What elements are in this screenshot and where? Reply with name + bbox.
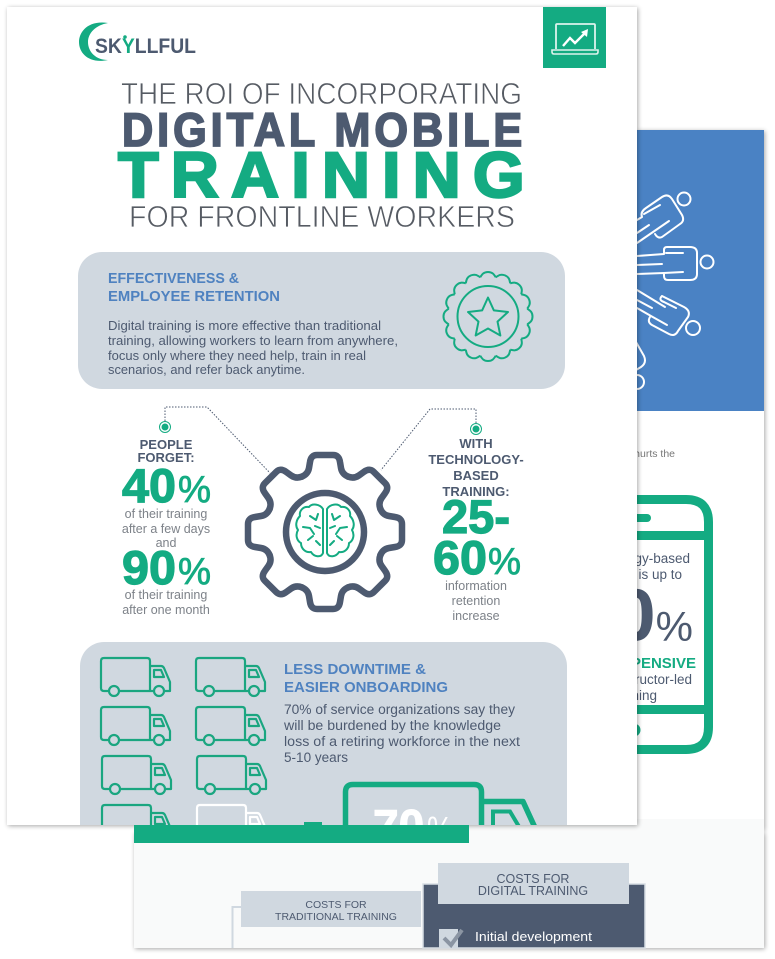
- stat: 90%: [123, 550, 210, 586]
- stat block: technology-based training: WITH: [459, 436, 493, 451]
- stat block: technology-based training: [428, 436, 524, 623]
- icon: truck grid: [101, 658, 266, 838]
- panel: effectiveness and employee retention: EMPLOYEE RETENTION: [108, 288, 280, 305]
- title: [118, 76, 525, 234]
- stat block: people forget: and: [156, 536, 176, 550]
- panel: bottom page costs comparison: [134, 819, 764, 948]
- panel: effectiveness and employee retention: training, allowing workers to learn from anywhere,: [108, 334, 398, 348]
- stat: 40%: %: [178, 469, 211, 511]
- checkbox item: initial development: Initial development: [475, 929, 592, 944]
- icon: star badge: [444, 272, 532, 361]
- phone text: training is up to: [590, 567, 682, 582]
- stat: 90%: %: [178, 551, 211, 593]
- panel: less downtime and easier onboarding: EASIER ONBOARDING: [284, 679, 448, 696]
- stat block: people forget: of their training: [125, 588, 207, 602]
- panel: effectiveness and employee retention: scenarios, and refer back anytime.: [108, 363, 305, 377]
- logo: Skyllful: SKYLLFUL: [95, 35, 196, 58]
- stat block: technology-based training: TECHNOLOGY-: [428, 452, 524, 467]
- icon: large truck with 70%: [342, 782, 537, 825]
- phone text: technology-based: [583, 551, 690, 566]
- title: THE ROI OF INCORPORATING: [121, 76, 522, 111]
- body text fragment: hurts the: [634, 448, 675, 460]
- panel: effectiveness and employee retention: focus only where they need help, train in real: [108, 349, 366, 363]
- icon: phone outline: [600, 500, 708, 750]
- panel: less downtime and easier onboarding: [80, 642, 567, 825]
- large percentage: 50: [575, 576, 655, 656]
- blue header band: [636, 130, 764, 411]
- dotted connector: right: [381, 409, 482, 470]
- stat block: people forget: PEOPLE: [140, 437, 193, 452]
- header: costs for digital training: COSTS FOR: [497, 872, 569, 886]
- panel: less downtime and easier onboarding: 70% of service organizations say they: [284, 702, 515, 717]
- digital training panel: [423, 884, 645, 948]
- traditional column outline: [232, 907, 245, 948]
- stat: 25-60%: 60: [433, 531, 487, 584]
- stat block: technology-based training: increase: [452, 609, 500, 623]
- icon: group of people: [630, 192, 714, 389]
- stat: 25-60%: 25-: [442, 490, 510, 543]
- header: costs for traditional training: TRADITIONAL TRAINING: [275, 911, 397, 923]
- green bar on bottom page: [134, 825, 469, 843]
- title: FOR FRONTLINE WORKERS: [129, 199, 515, 234]
- panel: effectiveness and employee retention: EFFECTIVENESS &: [108, 270, 239, 287]
- stat: 40%: [122, 468, 210, 504]
- checkbox item: initial development: [439, 929, 592, 948]
- stat: 40%: 40: [122, 459, 176, 512]
- icon: large truck with 70%: %: [427, 809, 453, 850]
- header: costs for traditional training: COSTS FOR: [305, 899, 367, 911]
- panel: less downtime and easier onboarding: will be burdened by the knowledge: [283, 718, 501, 733]
- icon: large truck with 70%: 70: [373, 800, 424, 852]
- stat: 90%: 90: [122, 541, 176, 594]
- stat: 25-60%: [434, 499, 520, 576]
- phone text: training: [613, 688, 657, 703]
- stat block: people forget: of their training: [125, 507, 207, 521]
- stat block: technology-based training: BASED: [453, 468, 499, 483]
- stat block: technology-based training: TRAINING:: [442, 484, 510, 499]
- stat block: people forget: FORGET:: [137, 450, 195, 465]
- icon: laptop with growth arrow: [543, 7, 606, 68]
- phone text: LESS EXPENSIVE: [568, 655, 696, 672]
- stat block: people forget: [122, 437, 211, 617]
- header: costs for digital training: DIGITAL TRAINING: [478, 884, 588, 898]
- panel: less downtime and easier onboarding: LESS DOWNTIME &: [284, 661, 426, 678]
- stat: 25-60%: %: [488, 541, 521, 583]
- icon: gear with brain: [248, 455, 402, 609]
- stat block: people forget: after one month: [122, 603, 210, 617]
- panel: main page: [7, 7, 637, 852]
- logo: Skyllful: [79, 23, 196, 61]
- phone text: than instructor-led: [584, 672, 692, 687]
- large percentage: [575, 576, 693, 656]
- large percentage: %: [656, 603, 693, 650]
- title: DIGITAL MOBILE: [122, 103, 522, 156]
- header: costs for digital training: [438, 863, 629, 904]
- panel: less downtime and easier onboarding: loss of a retiring workforce in the next: [284, 734, 520, 749]
- stat block: technology-based training: information: [445, 579, 507, 593]
- panel: effectiveness and employee retention: Digital training is more effective than traditional: [108, 319, 381, 333]
- panel: effectiveness and employee retention: [78, 252, 565, 389]
- stat block: technology-based training: retention: [452, 594, 500, 608]
- dotted connector: left: [160, 407, 270, 473]
- panel: less downtime and easier onboarding: 5-10 years: [284, 750, 348, 765]
- stat block: people forget: after a few days: [122, 522, 210, 536]
- header: costs for traditional training: [241, 891, 421, 927]
- panel: back page with blue header and phone: [637, 128, 768, 833]
- phone text: [568, 551, 696, 703]
- title: TRAINING: [118, 139, 525, 211]
- minus sign: [304, 822, 322, 825]
